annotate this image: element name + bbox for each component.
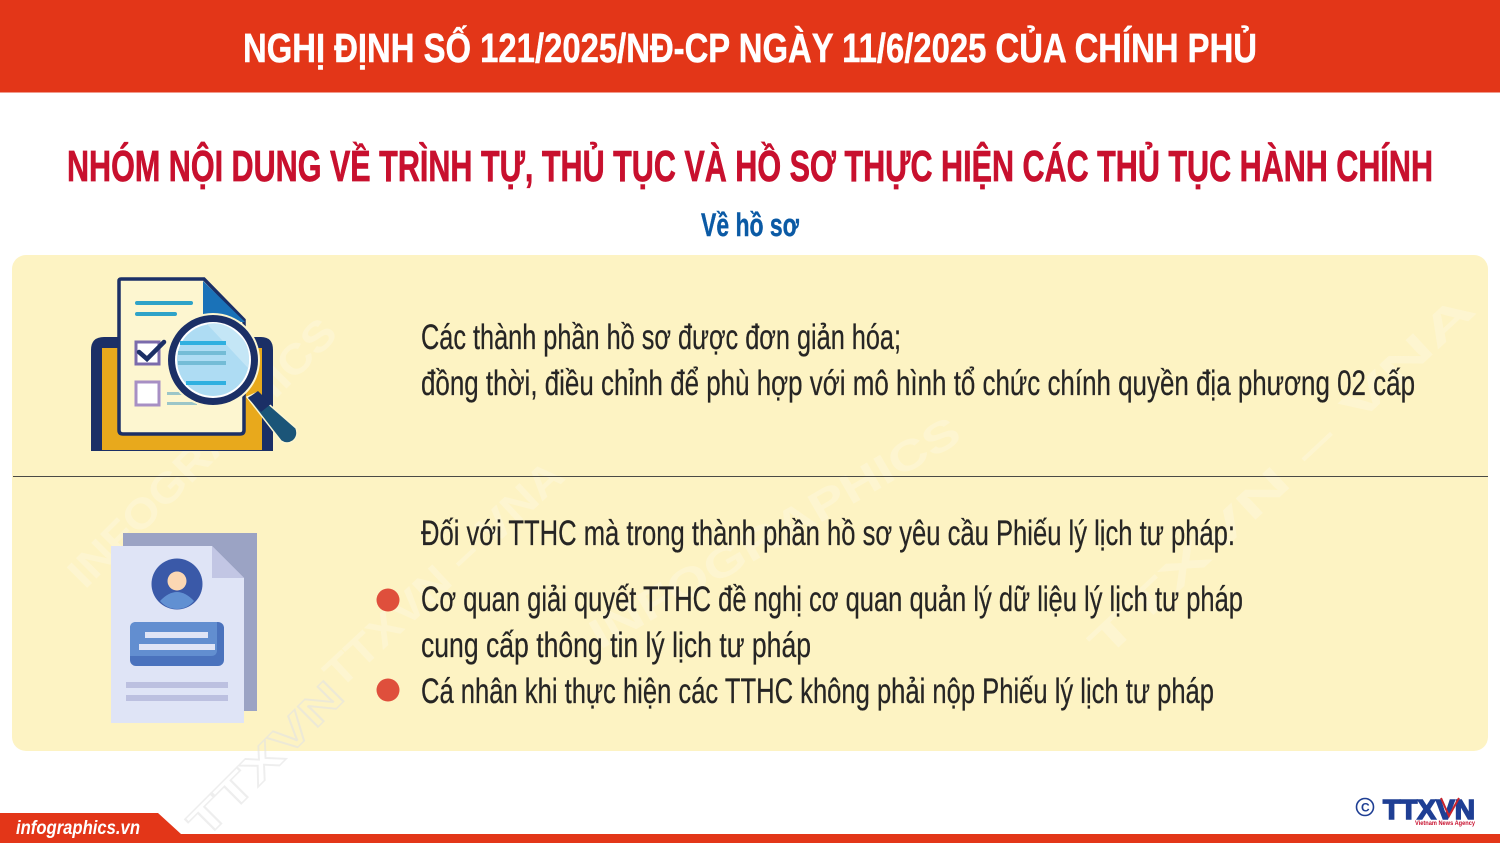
header band <box>0 0 1500 92</box>
watermark: TTXVN <box>178 672 353 843</box>
subheading: Về hồ sơ <box>701 207 799 243</box>
logo: TTXVN: Vietnam News Agency <box>1415 821 1476 827</box>
text block: bullet 1: cung cấp thông tin lý lịch tư pháp <box>421 626 811 665</box>
text block: bullet 2: Cá nhân khi thực hiện các TTHC không phải nộp Phiếu lý lịch tư pháp <box>421 672 1214 711</box>
bullet marker 2 <box>376 678 400 702</box>
text block: simplified dossier components: Các thành phần hồ sơ được đơn giản hóa; <box>421 318 901 357</box>
text block: bullet 1 <box>421 580 1243 665</box>
header title: NGHỊ ĐỊNH SỐ 121/2025/NĐ-CP NGÀY 11/6/2025 CỦA CHÍNH PHỦ <box>243 25 1257 71</box>
watermark: INFOGRAPHICS <box>581 407 968 658</box>
panel: content background <box>12 255 1488 751</box>
magnifier handle <box>247 393 297 443</box>
magnifier lens <box>166 313 260 407</box>
divider <box>13 476 1488 478</box>
footer website label: infographics.vn <box>16 818 140 839</box>
bullet marker 1 <box>376 588 400 612</box>
icon: personal record document <box>111 533 257 723</box>
icon: document with magnifier <box>91 279 297 451</box>
footer bar <box>0 813 1500 843</box>
logo: TTXVN: TTXVN <box>1383 794 1475 825</box>
watermark <box>58 284 1484 843</box>
watermark: TTXVN – VNA <box>1079 284 1484 667</box>
logo: TTXVN: C <box>1361 800 1370 814</box>
watermark: TTXVN – VNA <box>314 451 573 697</box>
text block: simplified dossier components <box>421 318 1415 403</box>
watermark: INFOGRAPHICS <box>58 309 346 596</box>
